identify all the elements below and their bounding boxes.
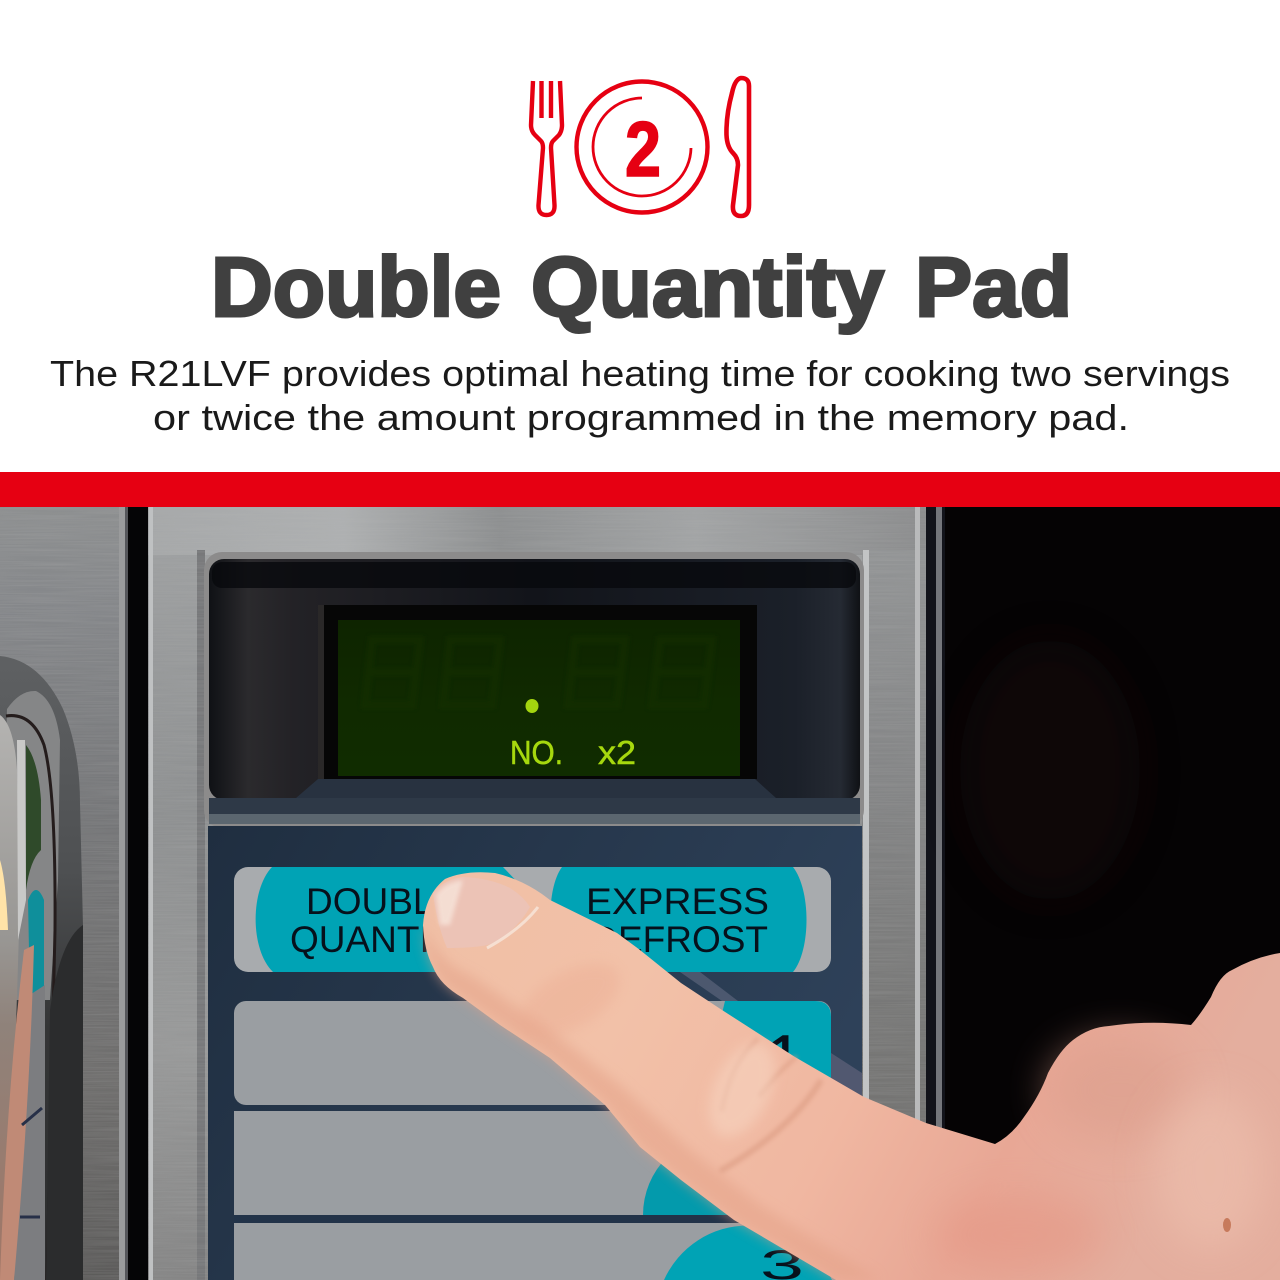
knuckle creases (722, 1040, 820, 1170)
handle bright strip (17, 740, 26, 940)
handle mirror bulb (0, 715, 20, 1280)
handle dark seam (6, 716, 55, 1280)
LCD screen (338, 620, 740, 776)
handle outer band (0, 650, 90, 1280)
gray reflection (14, 985, 45, 1280)
display lower lip (296, 779, 776, 798)
title (211, 240, 1072, 334)
teal reflection (28, 890, 44, 1000)
icon: plate (576, 82, 708, 212)
hand redness patch (935, 1195, 1105, 1275)
display bezel (204, 552, 864, 828)
LCD recess (318, 605, 757, 779)
unlit LCD digits (365, 640, 712, 705)
button label: double quantity: DOUBLE (306, 881, 458, 922)
hand pressing the button (423, 872, 1280, 1280)
hand and finger shape (423, 872, 1280, 1280)
green reflection (26, 745, 41, 890)
number pad row 1 (234, 1001, 831, 1105)
purple shadow on keypad (831, 1053, 862, 1097)
photo: microwave control panel (0, 507, 1280, 1280)
fingernail (433, 877, 530, 948)
finger underside shadow (423, 925, 880, 1280)
cuticle (487, 907, 538, 948)
skin mole (1223, 1218, 1231, 1232)
pink finger reflection (0, 945, 34, 1280)
red divider band (0, 472, 1280, 507)
button label: double quantity (292, 888, 426, 960)
door handle (0, 650, 90, 1280)
hand pale patch (1155, 1090, 1265, 1250)
numeral 1: 1 (764, 1021, 804, 1101)
title word: Pad: Pad (915, 240, 1072, 334)
navy reflection lines (20, 1108, 42, 1217)
double quantity button (256, 867, 525, 972)
button label: express defrost: EXPRESS (586, 881, 769, 922)
handle lower dark band (46, 925, 83, 1280)
finger joint shade (508, 948, 632, 1052)
steel control frame (148, 507, 928, 1280)
title word: Double: Double (211, 240, 501, 334)
LCD label: x2: x2 (598, 734, 636, 771)
finger shadow on keypad (680, 972, 738, 1001)
icon: knife (726, 78, 749, 216)
left door steel panel (0, 507, 127, 1280)
handle silver shoulder (6, 691, 60, 1000)
button label: express defrost: DEFROST (591, 919, 768, 960)
right side trim (926, 507, 946, 1280)
teal pad 1 (722, 1001, 831, 1078)
icon: plate with number 2 between fork and knife (531, 78, 749, 216)
number pad row 3 (234, 1223, 862, 1280)
description text (50, 353, 1230, 438)
icon: number 2: 2 (625, 105, 661, 193)
keypad base (208, 824, 862, 1280)
number pad row 2 (234, 1111, 661, 1215)
teal pad 2 (643, 1164, 728, 1215)
orange highlight (0, 860, 8, 930)
teal pad 3 (664, 1226, 832, 1280)
nail highlight (436, 880, 463, 925)
function button strip (234, 867, 831, 972)
LCD label: NO.: NO. (510, 734, 563, 771)
knuckle highlight (695, 1033, 789, 1147)
button label: express defrost (589, 888, 768, 952)
black oven window (945, 507, 1280, 1280)
keypad membrane (208, 824, 862, 1280)
button label: double quantity: QUANTITY (290, 919, 477, 960)
description line 1: The R21LVF provides optimal heating time for cooking two servings (50, 353, 1230, 394)
icon: fork (531, 81, 562, 215)
LCD dot indicator (526, 699, 538, 713)
back of hand shade (1050, 1040, 1190, 1140)
express defrost button (550, 867, 806, 972)
black door gap (128, 507, 150, 1280)
description line 2: or twice the amount programmed in the memory pad. (153, 397, 1129, 438)
title word: Quantity: Quantity (531, 240, 884, 334)
